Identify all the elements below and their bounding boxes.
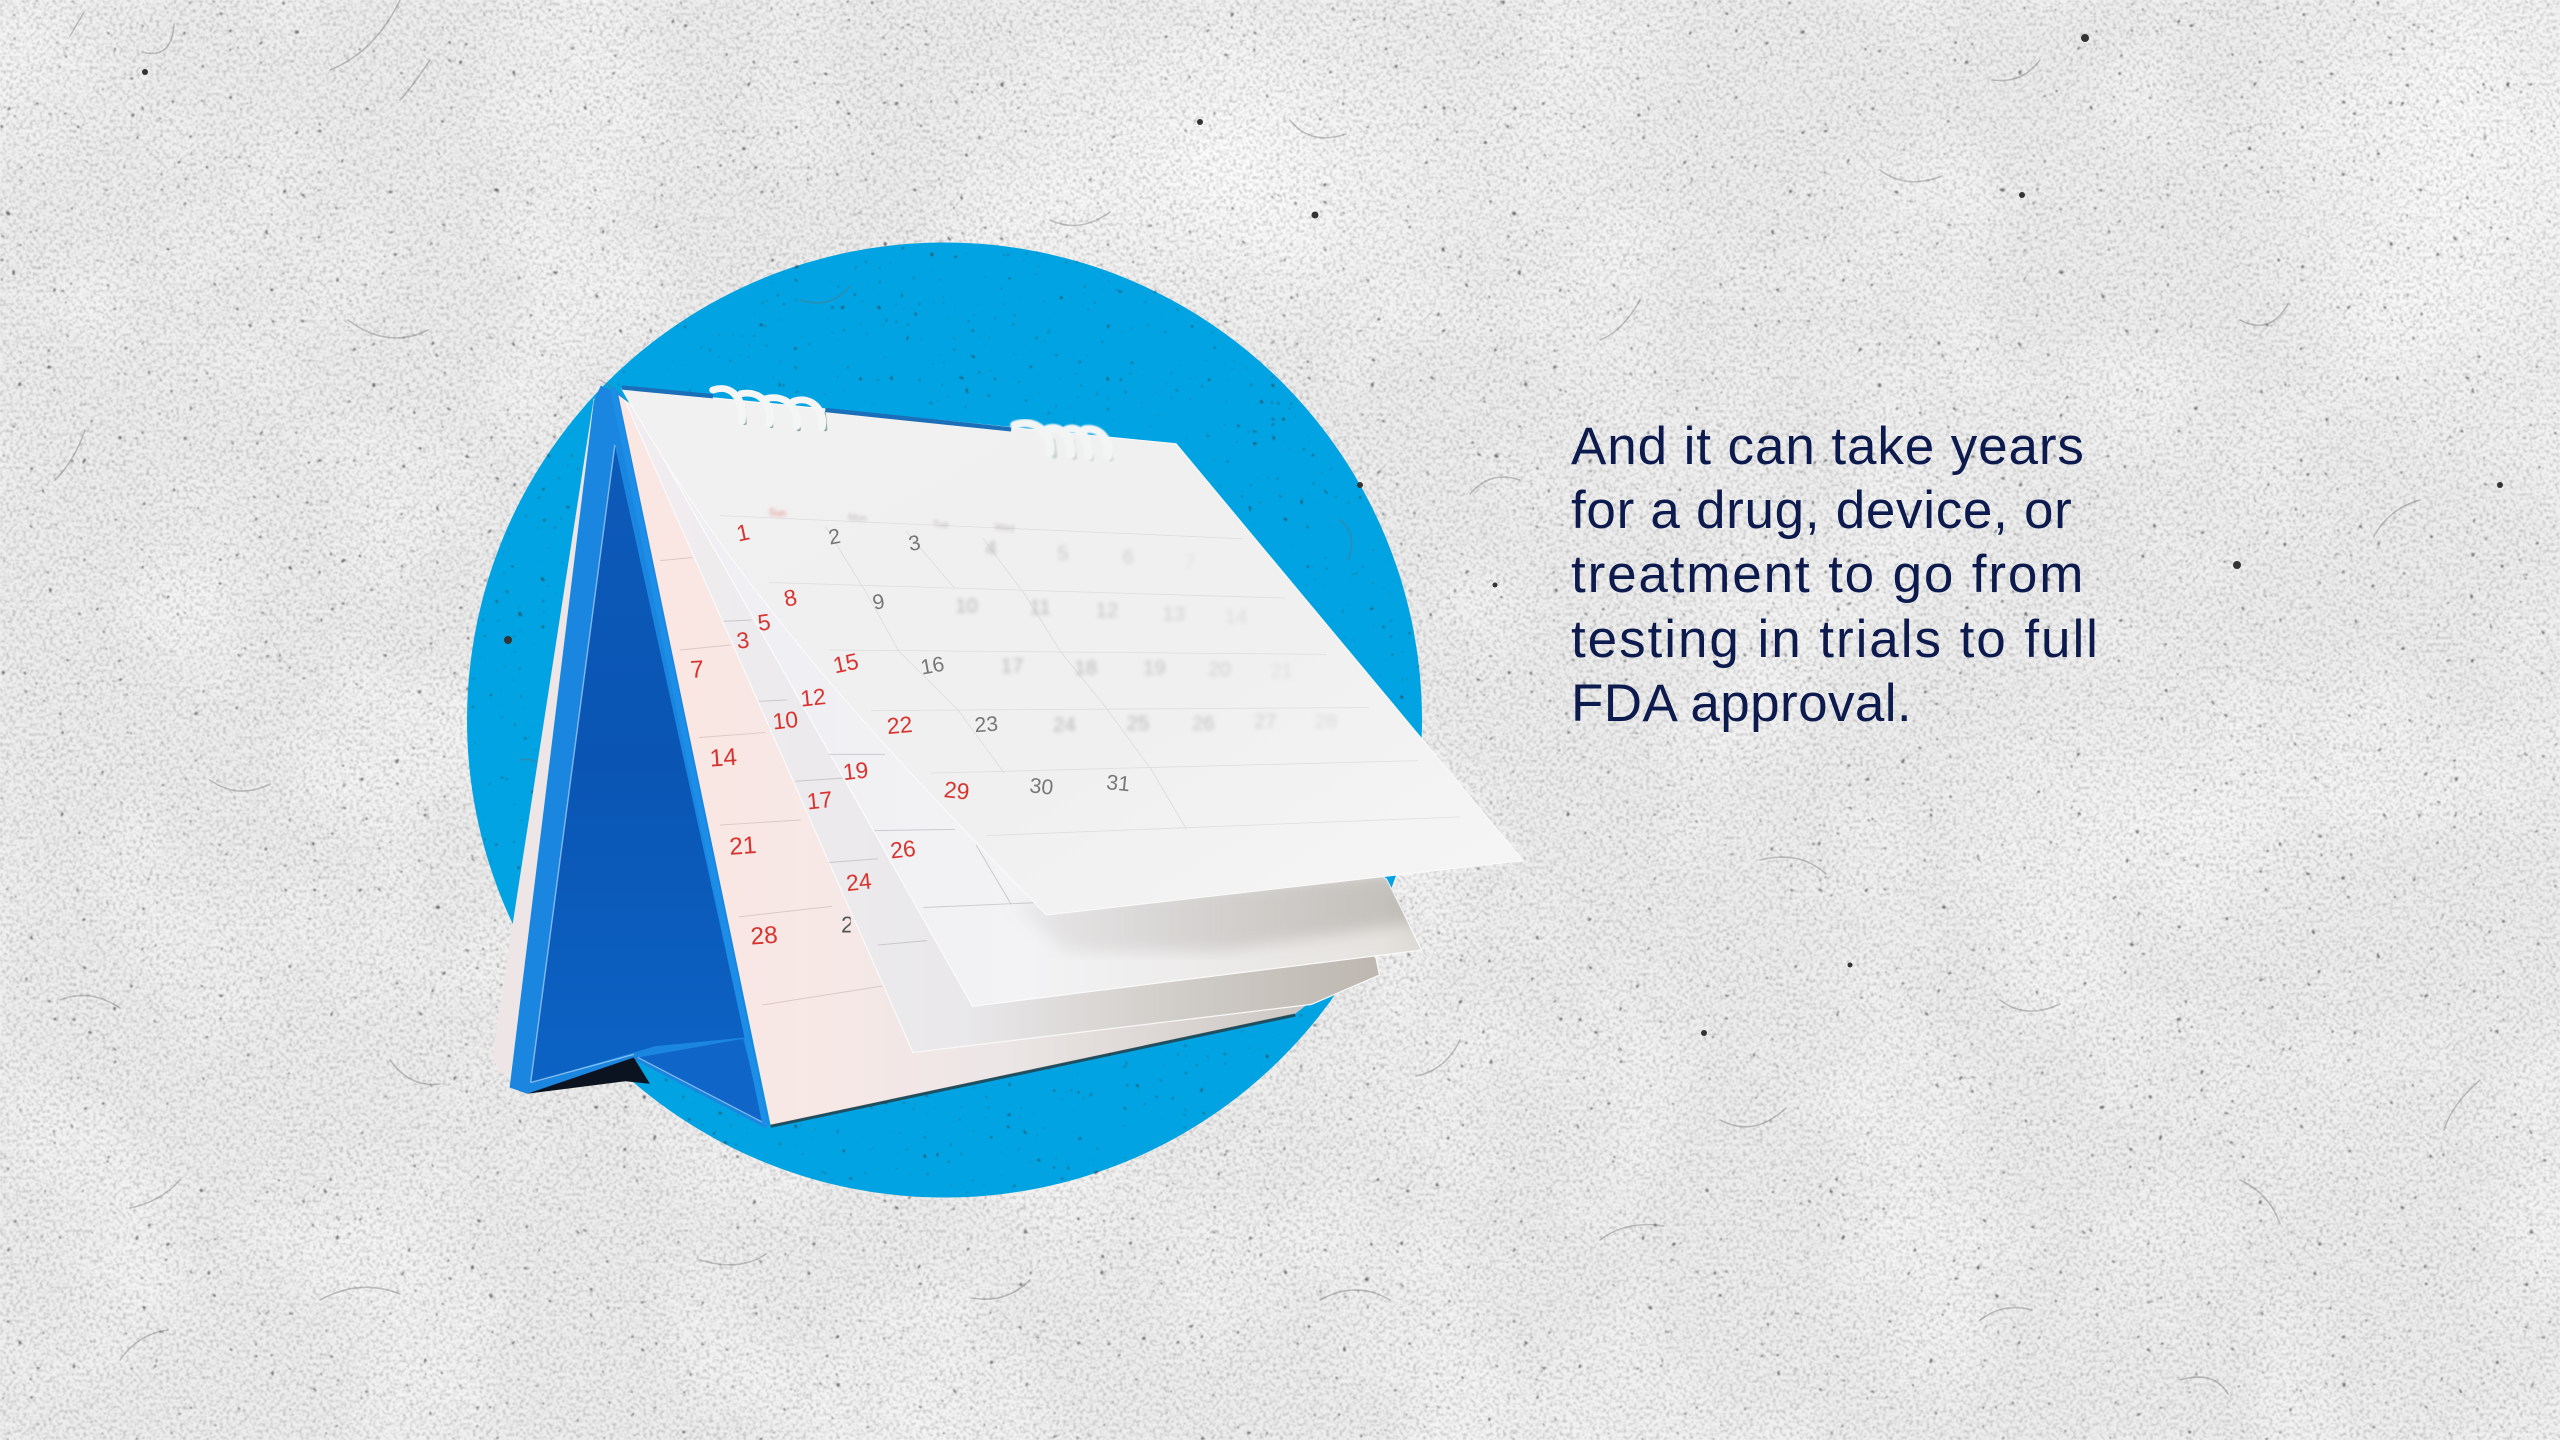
under page red dates: 17 bbox=[806, 786, 834, 814]
blurred dates: 14 bbox=[1225, 607, 1247, 629]
blurred dates: 28 bbox=[1314, 711, 1337, 733]
blurred dates bbox=[955, 538, 1337, 736]
blurred dates: 6 bbox=[1123, 546, 1134, 568]
weekday labels: Wed bbox=[994, 522, 1015, 534]
spiral rings right bbox=[1015, 423, 1111, 459]
top page grey dates: 9 bbox=[871, 590, 887, 615]
top page grey dates: 31 bbox=[1105, 771, 1131, 796]
weekday labels: Mon bbox=[847, 512, 867, 525]
under page red dates: 21 bbox=[728, 832, 757, 861]
base page shadow edge bbox=[771, 1015, 1295, 1126]
under page red dates: 19 bbox=[842, 757, 870, 785]
text block: FDA approval message: FDA approval. bbox=[1571, 674, 1912, 733]
top page bbox=[622, 389, 1523, 915]
blurred dates: 21 bbox=[1270, 661, 1293, 683]
base page bbox=[618, 395, 1311, 1125]
blurred dates: 26 bbox=[1192, 713, 1215, 735]
top page grey dates: 3 bbox=[907, 531, 922, 556]
text block: FDA approval message: for a drug, device, or bbox=[1571, 481, 2072, 540]
top page red dates bbox=[734, 518, 971, 805]
top page grey dates: 30 bbox=[1029, 774, 1054, 800]
top page red dates: 29 bbox=[943, 776, 971, 805]
blurred dates: 13 bbox=[1163, 603, 1185, 625]
partly hidden grey date: 2 bbox=[841, 911, 854, 937]
under page red dates: 10 bbox=[771, 706, 799, 734]
under page red dates bbox=[689, 608, 917, 951]
shadow under cover bbox=[527, 1058, 650, 1094]
blurred dates: 7 bbox=[1185, 551, 1196, 573]
under page red dates: 12 bbox=[799, 683, 827, 712]
back pages edge bbox=[492, 398, 601, 1075]
text block: FDA approval message bbox=[1571, 417, 2100, 733]
shadow cast by top page bbox=[1011, 873, 1432, 951]
top page red dates: 8 bbox=[781, 584, 799, 612]
blue circle behind calendar bbox=[467, 242, 1422, 1198]
under page red dates: 5 bbox=[756, 608, 772, 636]
cover inner face bbox=[531, 445, 745, 1082]
text block: FDA approval message: testing in trials to full bbox=[1571, 610, 2100, 669]
top page grey dates: 2 bbox=[827, 525, 842, 550]
weekday labels: Tue bbox=[932, 519, 949, 531]
blurred dates: 24 bbox=[1053, 714, 1076, 736]
text block: FDA approval message: And it can take years bbox=[1571, 417, 2085, 476]
under page red dates: 26 bbox=[889, 835, 917, 863]
calendar photo bbox=[492, 386, 1523, 1128]
blurred dates: 4 bbox=[985, 538, 997, 560]
top page grey dates: 16 bbox=[919, 653, 946, 680]
blurred dates: 12 bbox=[1096, 600, 1118, 622]
blurred dates: 25 bbox=[1127, 713, 1149, 735]
under page red dates: 24 bbox=[845, 868, 873, 896]
under page red dates: 7 bbox=[689, 656, 705, 684]
spine edge bbox=[622, 388, 1011, 429]
cover floor fold bbox=[638, 1039, 764, 1123]
blurred dates: 20 bbox=[1208, 659, 1231, 681]
under page red dates: 28 bbox=[750, 922, 779, 951]
blurred dates: 11 bbox=[1029, 597, 1051, 619]
text block: FDA approval message: treatment to go from bbox=[1571, 545, 2085, 604]
top page grey dates bbox=[827, 525, 1131, 800]
spiral rings left bbox=[713, 389, 825, 429]
top page red dates: 22 bbox=[886, 711, 913, 739]
blurred dates: 17 bbox=[1001, 656, 1024, 678]
blurred dates: 10 bbox=[955, 595, 978, 617]
under page red dates: 14 bbox=[709, 744, 738, 773]
weekday labels: Sun bbox=[768, 507, 787, 520]
under page red dates: 3 bbox=[735, 627, 751, 654]
third page bbox=[631, 401, 1422, 1006]
weekday labels bbox=[768, 507, 1015, 534]
blurred dates: 18 bbox=[1074, 657, 1097, 679]
second page bbox=[625, 401, 1379, 1052]
blurred dates: 5 bbox=[1057, 543, 1069, 565]
blurred dates: 27 bbox=[1254, 711, 1277, 733]
blue cover frame bbox=[510, 386, 769, 1128]
top page red dates: 15 bbox=[831, 648, 861, 678]
top page red dates: 1 bbox=[734, 518, 752, 546]
calendar dates bbox=[689, 507, 1337, 951]
top page grey dates: 23 bbox=[974, 713, 999, 737]
blurred dates: 19 bbox=[1143, 657, 1166, 679]
